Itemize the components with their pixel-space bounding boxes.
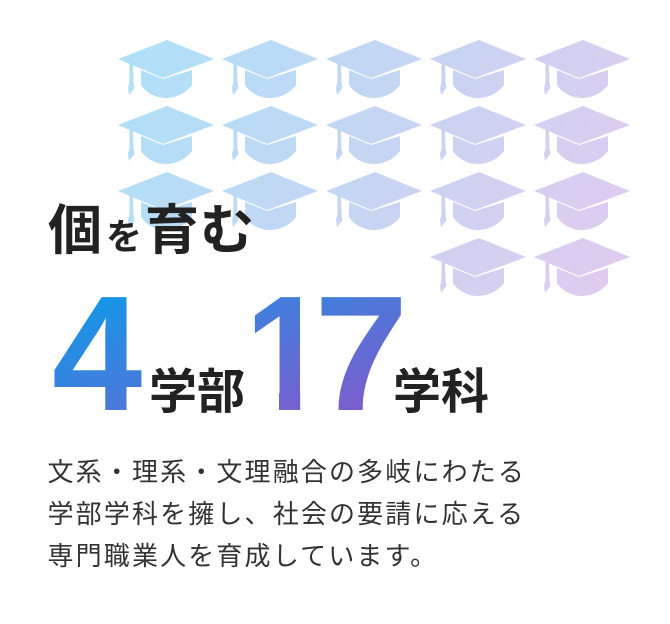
icon: cap 12: [222, 172, 318, 230]
icon: cap 6: [118, 106, 214, 164]
icon: cap 4: [430, 40, 526, 98]
heading: [48, 201, 254, 261]
description text: 学部学科を擁し、社会の要請に応える: [48, 499, 525, 529]
description text: 専門職業人を育成しています。: [48, 541, 438, 571]
icon: cap 17: [534, 238, 630, 296]
icon: cap 3: [326, 40, 422, 98]
description text: 文系・理系・文理融合の多岐にわたる: [48, 457, 526, 487]
icon: cap 15: [534, 172, 630, 230]
icon: cap 7: [222, 106, 318, 164]
icon: cap 16: [430, 238, 526, 296]
unit: 学部: 学部: [149, 366, 245, 419]
heading: 個: [48, 201, 102, 261]
big number: 4: 4: [52, 261, 142, 445]
graduation caps grid: [118, 40, 630, 296]
icon: cap 13: [326, 172, 422, 230]
icon: cap 2: [222, 40, 318, 98]
unit: 学科: 学科: [393, 366, 489, 419]
icon: cap 8: [326, 106, 422, 164]
description text: [48, 457, 526, 571]
icon: cap 14: [430, 172, 526, 230]
icon: cap 10: [534, 106, 630, 164]
icon: cap 5: [534, 40, 630, 98]
heading: 育: [145, 201, 199, 261]
heading: を: [106, 216, 142, 257]
big number: 1: 1: [245, 263, 328, 446]
heading: む: [200, 201, 254, 261]
big number: 7: 7: [314, 262, 408, 445]
icon: cap 1: [118, 40, 214, 98]
icon: cap 9: [430, 106, 526, 164]
icon: cap 11: [118, 172, 214, 230]
